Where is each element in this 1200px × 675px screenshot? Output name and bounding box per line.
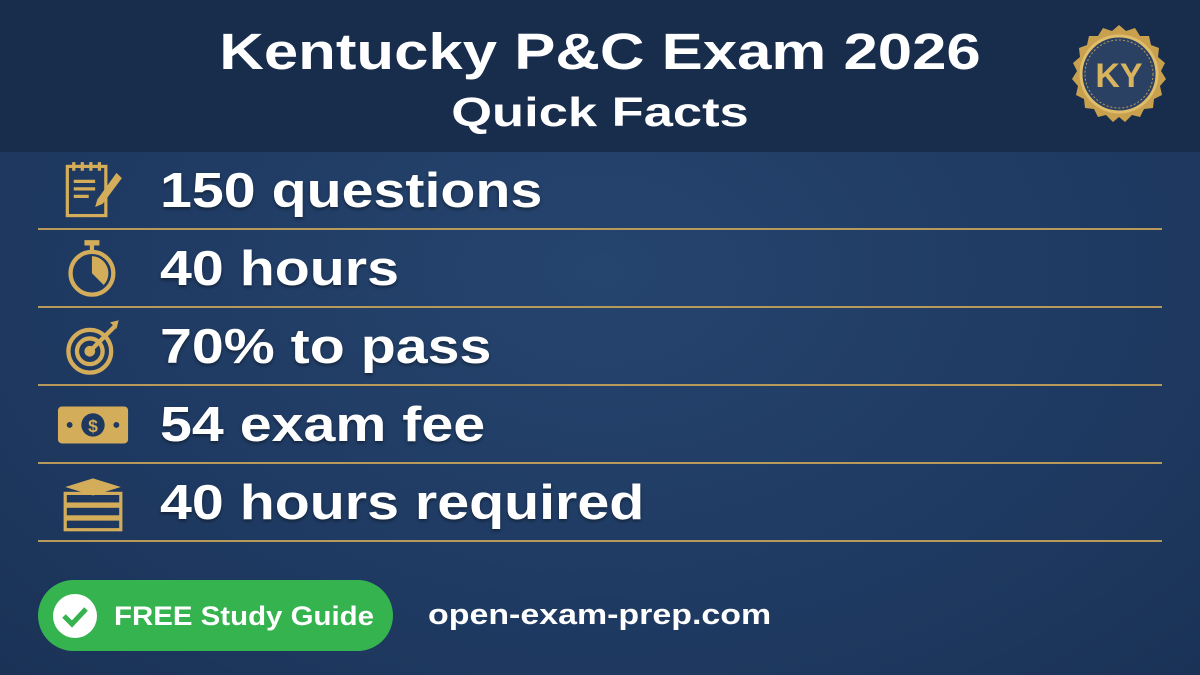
row: questions: 150 questions: [160, 164, 542, 218]
button: free study guide: FREE Study Guide: [114, 601, 374, 631]
row: pass: 70% to pass: [160, 320, 491, 374]
header band: [0, 0, 1200, 152]
row: hours: 40 hours: [160, 242, 399, 296]
icon: check: [53, 594, 97, 638]
url: open-exam-prep.com: [428, 599, 771, 631]
icon: notepad: [66, 162, 122, 218]
icon: bill: [58, 406, 128, 444]
row: pass: [38, 308, 1162, 386]
row: questions: [38, 152, 1162, 230]
button: free study guide: [38, 580, 393, 651]
icon: books: [64, 478, 122, 532]
icon: target: [66, 320, 119, 375]
icon: KY seal: KY: [1095, 57, 1143, 95]
icon: stopwatch: [68, 240, 116, 297]
icon: KY seal: [1072, 25, 1166, 122]
row: required: [38, 464, 1162, 542]
subtitle: Quick Facts: [451, 89, 749, 135]
row: hours: [38, 230, 1162, 308]
icon: bill: $: [88, 416, 98, 436]
row: required: 40 hours required: [160, 476, 644, 530]
row: fee: [38, 386, 1162, 464]
row: fee: 54 exam fee: [160, 398, 485, 452]
title: Kentucky P&C Exam 2026: [219, 23, 981, 80]
